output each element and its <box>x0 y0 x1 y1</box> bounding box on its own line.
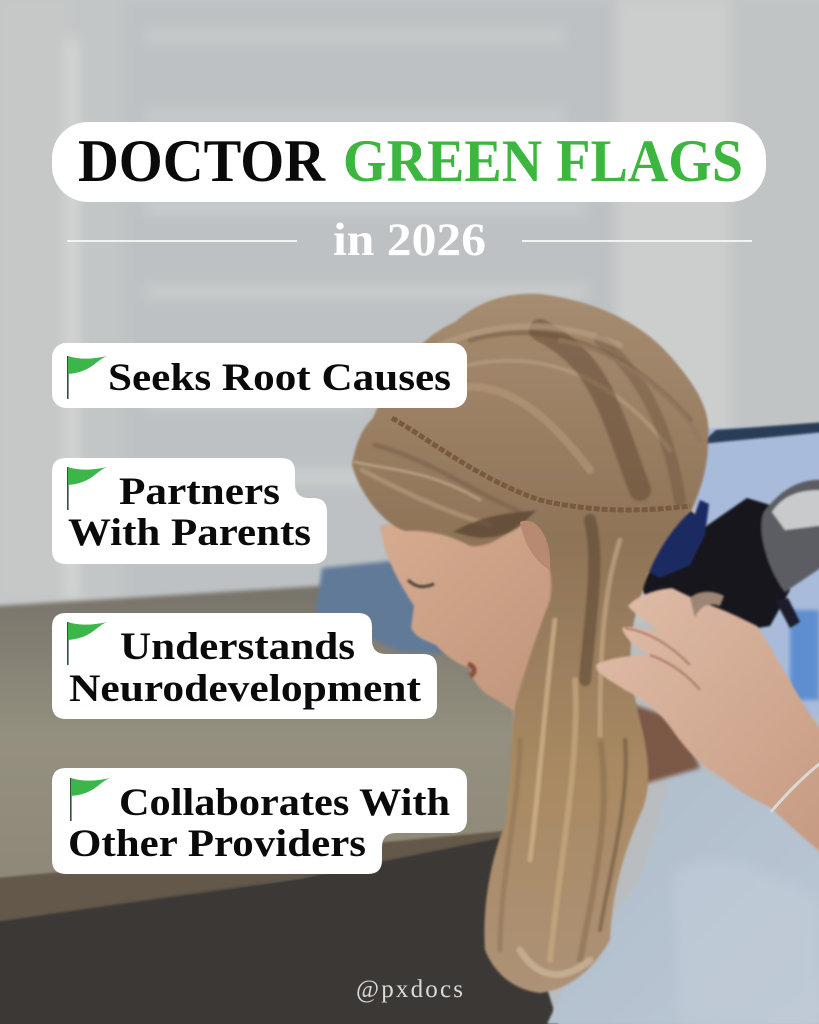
shirt fold <box>673 861 819 1024</box>
handle: @pxdocs <box>356 976 463 1003</box>
flag item: Understands Neurodevelopment <box>52 613 437 719</box>
icon: green flag <box>67 622 107 665</box>
table top <box>0 586 515 884</box>
flag item: Partners With Parents <box>52 458 327 564</box>
subtitle rule left <box>67 240 297 242</box>
ear <box>520 521 550 570</box>
flag item: Seeks Root Causes <box>52 343 467 408</box>
label text: Understands <box>120 625 355 668</box>
braid <box>392 418 690 510</box>
shirt <box>547 764 819 1024</box>
label bubble <box>52 613 437 719</box>
laptop on table <box>316 560 455 654</box>
eye and mouth <box>408 580 474 676</box>
label bubble <box>52 343 467 408</box>
hair strands <box>355 326 700 974</box>
label text: Neurodevelopment <box>69 667 421 710</box>
computer monitor <box>695 422 819 718</box>
neck <box>620 700 700 785</box>
girl with clip device <box>352 294 819 1024</box>
blue scrunchie <box>645 500 709 578</box>
label text: Partners <box>119 470 280 513</box>
dark floor <box>0 838 560 1024</box>
flag item: Collaborates With Other Providers <box>52 768 467 874</box>
label bubble <box>52 458 327 564</box>
black clip device <box>640 480 819 630</box>
icon: green flag <box>70 778 110 821</box>
title text black: DOCTOR <box>78 128 326 194</box>
hand holding clip <box>596 588 819 855</box>
subtitle rule right <box>522 240 752 242</box>
label text: Other Providers <box>68 822 366 865</box>
label text: Collaborates With <box>119 781 450 824</box>
bracelet <box>771 762 819 812</box>
face <box>380 520 580 715</box>
table edge <box>0 830 515 926</box>
label bubble <box>52 768 467 874</box>
wall and window shutters <box>0 0 819 620</box>
subtitle text: in 2026 <box>333 214 486 266</box>
title banner <box>52 122 766 202</box>
icon: green flag <box>67 467 107 510</box>
label text: With Parents <box>68 511 311 554</box>
hair <box>352 294 709 993</box>
icon: green flag <box>67 356 107 399</box>
title text green: GREEN FLAGS <box>343 128 743 194</box>
label text: Seeks Root Causes <box>108 356 451 399</box>
title pill <box>52 122 766 202</box>
